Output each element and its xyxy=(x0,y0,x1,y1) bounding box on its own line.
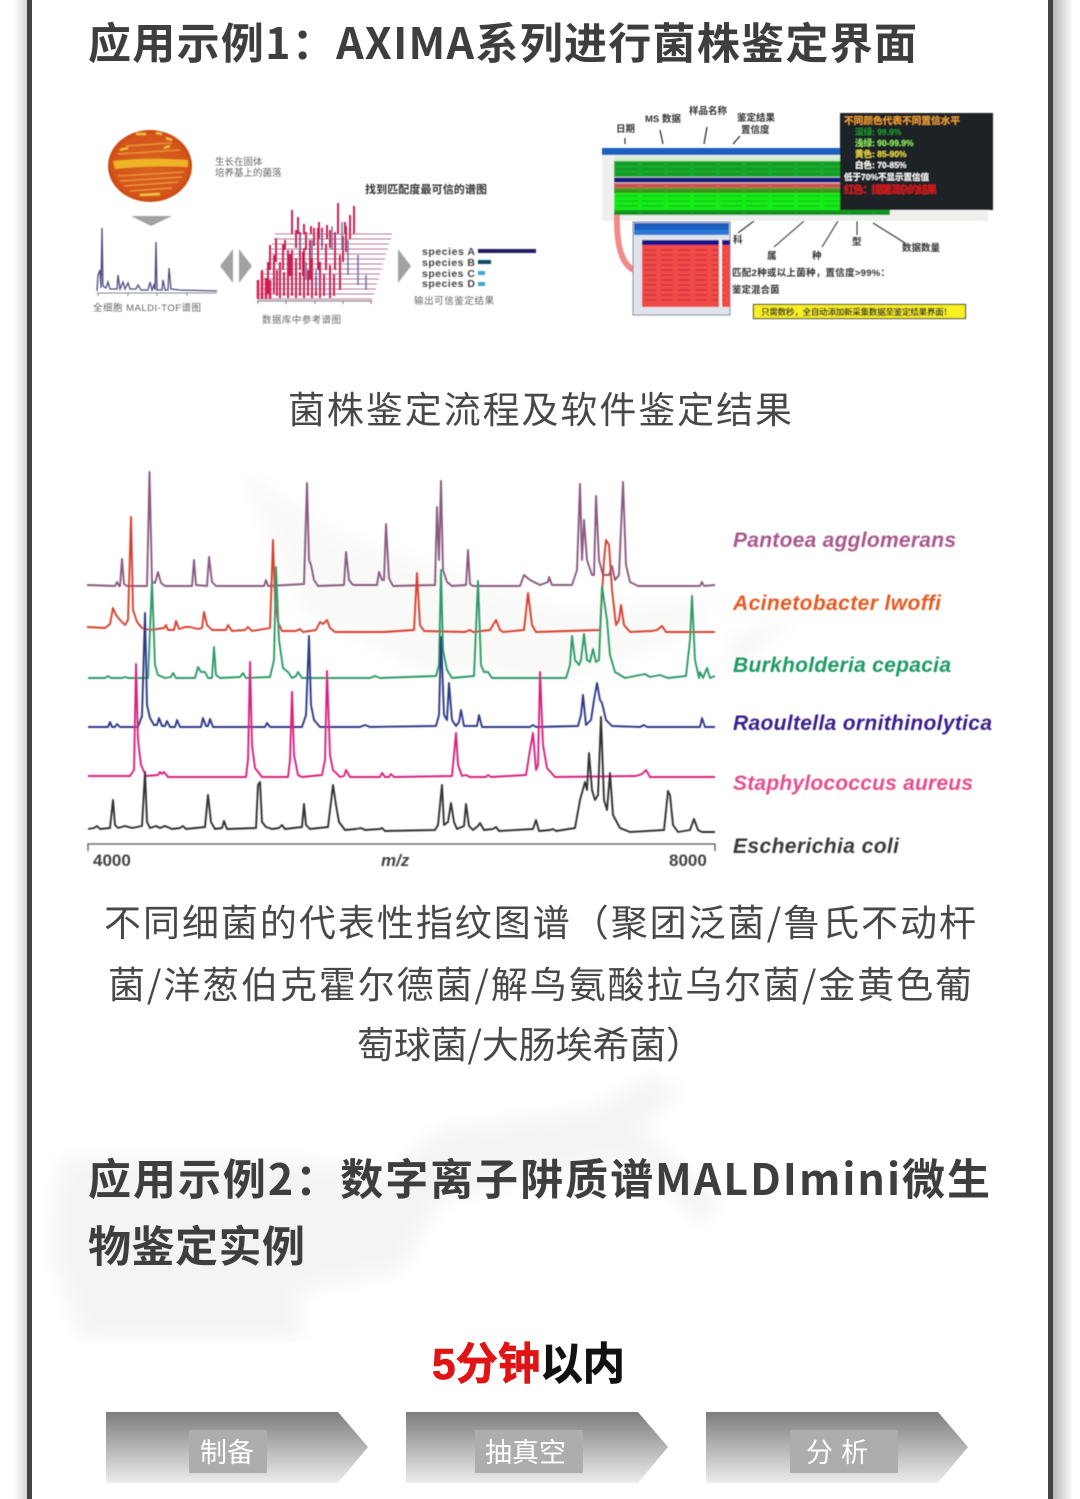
heading: example 2 xyxy=(88,1146,990,1275)
result caption: 输出可信鉴定结果 xyxy=(414,295,494,307)
trace: Pantoea xyxy=(87,472,715,586)
species labels: Raoultella ornithinolytica xyxy=(733,712,992,735)
curve to mixed window xyxy=(617,215,634,270)
axis label: m/z: m/z xyxy=(381,851,410,870)
confidence legend: 浅绿: 90-99.9% xyxy=(855,138,914,148)
species labels: Burkholderia cepacia xyxy=(733,654,951,677)
heading: example 1: 应用示例1：AXIMA系列进行菌株鉴定界面 xyxy=(88,10,917,72)
caption: workflow: 菌株鉴定流程及软件鉴定结果 xyxy=(288,380,792,434)
species labels: Staphylococcus aureus xyxy=(733,772,973,795)
caption: fingerprint spectra xyxy=(104,893,976,1069)
chart: reference spectra stack xyxy=(257,203,392,304)
match heading: 找到匹配度最可信的谱图 xyxy=(365,182,487,196)
column labels top: 样品名称 xyxy=(689,105,728,117)
panel: MALDImini workflow xyxy=(83,1340,1003,1499)
species labels: Acinetobacter lwoffi xyxy=(732,592,942,615)
right frame bar xyxy=(1048,0,1073,1499)
column labels top: MS 数据 xyxy=(645,113,681,125)
icon: petri dish xyxy=(108,130,192,202)
step: preparation xyxy=(106,1412,368,1483)
axis xyxy=(88,844,715,851)
taxonomy labels: 属 xyxy=(767,251,777,262)
colony label: 培养基上的菌落 xyxy=(215,167,282,179)
confidence legend xyxy=(840,113,993,210)
axis label: 8000: 8000 xyxy=(669,851,707,870)
panel: software result screen xyxy=(602,105,993,318)
arrow: output xyxy=(398,249,411,283)
column labels top xyxy=(616,105,776,136)
arrows to taxonomy xyxy=(738,221,905,247)
arrow: compare left xyxy=(220,249,233,283)
trace: Escherichia xyxy=(88,717,715,832)
axis label: 4000: 4000 xyxy=(93,851,131,870)
caption: fingerprint spectra: 萄球菌/大肠埃希菌） xyxy=(357,1015,703,1069)
reference caption: 数据库中参考谱图 xyxy=(262,314,341,326)
colony label: 生长在固体 xyxy=(215,156,263,168)
mixed strain note xyxy=(732,267,890,296)
arrows to columns xyxy=(625,127,740,144)
species labels: Escherichia coli xyxy=(733,835,900,858)
trace: Staphylococcus xyxy=(88,662,715,777)
mixed strain note: 鉴定混合菌 xyxy=(732,284,780,296)
species result bars xyxy=(422,246,536,290)
arrow: compare right xyxy=(239,249,252,283)
trace: Burkholderia xyxy=(88,567,715,678)
step: analysis xyxy=(706,1412,968,1483)
species result bars: species A xyxy=(422,246,475,258)
panel: identification workflow xyxy=(93,130,536,326)
confidence legend: 红色：提醒混杂的结果 xyxy=(844,183,938,196)
chart: whole-cell spectrum xyxy=(97,228,217,296)
mixed strain window xyxy=(633,222,730,315)
heading: example 2: 物鉴定实例 xyxy=(88,1213,305,1275)
caption: fingerprint spectra: 不同细菌的代表性指纹图谱（聚团泛菌/鲁氏不动杆 xyxy=(104,893,976,947)
taxonomy labels: 数据数量 xyxy=(902,242,941,254)
time heading: 5分钟以内 xyxy=(432,1340,625,1389)
step: vacuum: 抽真空 xyxy=(485,1438,566,1468)
species result bars: species B xyxy=(422,257,475,269)
arrow: down xyxy=(131,216,172,226)
step: analysis: 分析 xyxy=(806,1438,868,1468)
trace: Raoultella xyxy=(88,613,715,727)
heading: example 2: 应用示例2：数字离子阱质谱MALDImini微生 xyxy=(88,1146,990,1208)
result table xyxy=(602,148,988,221)
confidence legend: 黄色: 85-90% xyxy=(855,149,907,159)
confidence legend: 低于70%不显示置信值 xyxy=(844,172,930,182)
column labels top: 鉴定结果 xyxy=(737,112,776,124)
confidence legend: 不同颜色代表不同置信水平 xyxy=(844,114,960,127)
trace: Acinetobacter xyxy=(87,517,715,632)
taxonomy labels: 科 xyxy=(733,234,743,246)
species labels xyxy=(732,529,992,858)
column labels top: 日期 xyxy=(616,123,635,135)
yellow callout: 只需数秒，全自动添加新采集数据至鉴定结果界面！ xyxy=(761,306,952,317)
background watermark: milk splash xyxy=(50,470,860,1340)
taxonomy labels: 种 xyxy=(812,250,822,262)
taxonomy labels xyxy=(733,234,941,262)
confidence legend: 深绿: 99.9% xyxy=(855,127,902,137)
yellow callout xyxy=(754,304,966,318)
taxonomy labels: 型 xyxy=(852,236,862,248)
species labels: Pantoea agglomerans xyxy=(733,529,956,552)
left frame bar xyxy=(0,0,32,1499)
spectrum caption: 全细胞 MALDI-TOF谱图 xyxy=(93,302,201,314)
mixed strain note: 匹配2种或以上菌种，置信度>99%： xyxy=(732,267,890,279)
species result bars: species C xyxy=(422,268,475,280)
step: vacuum xyxy=(406,1412,668,1483)
step: preparation: 制备 xyxy=(200,1438,254,1468)
chart: bacterial fingerprint spectra xyxy=(87,472,992,870)
column labels top: 置信度 xyxy=(741,124,770,136)
confidence legend: 白色: 70-85% xyxy=(855,160,907,170)
colony label xyxy=(215,156,282,179)
species result bars: species D xyxy=(422,278,475,290)
caption: fingerprint spectra: 菌/洋葱伯克霍尔德菌/解鸟氨酸拉乌尔菌/金黄色葡 xyxy=(108,955,972,1009)
